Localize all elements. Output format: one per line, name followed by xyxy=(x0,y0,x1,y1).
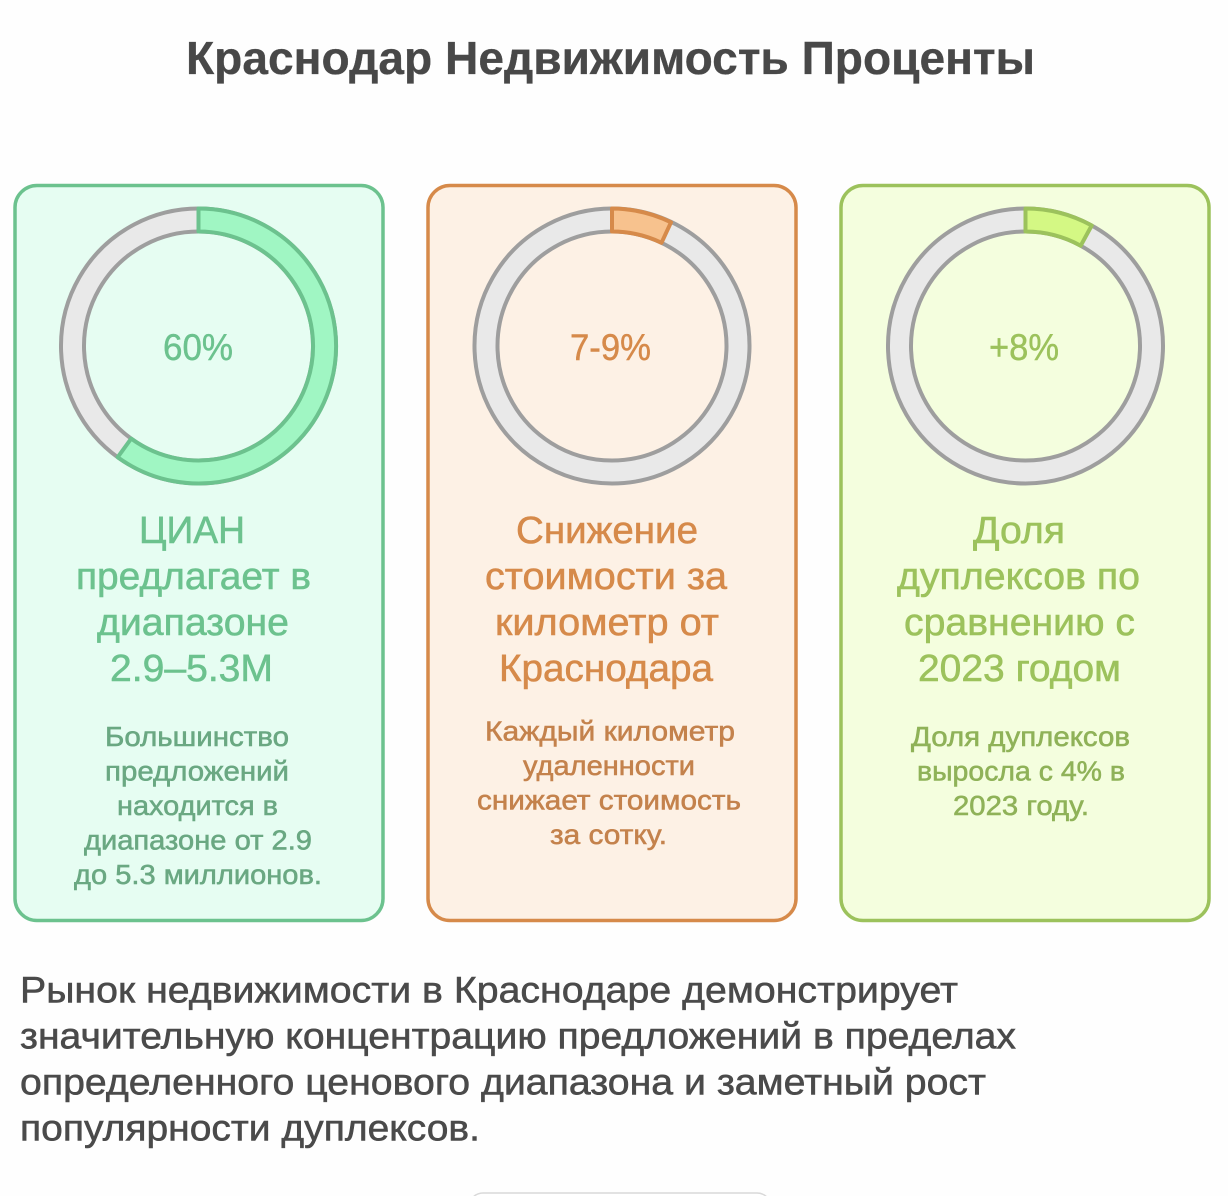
panel heading xyxy=(897,510,1140,690)
panel heading: дуплексов по xyxy=(897,556,1140,598)
panel description xyxy=(74,721,322,890)
panel: ЦИАН 60% xyxy=(15,186,383,920)
panel description: Большинство xyxy=(105,721,289,752)
panel description: за сотку. xyxy=(550,819,667,850)
donut chart: 60% xyxy=(61,208,336,483)
donut chart: +8%: +8% xyxy=(989,327,1059,368)
summary text: Рынок недвижимости в Краснодаре демонстрирует xyxy=(20,970,958,1010)
panel description: предложений xyxy=(105,756,289,786)
panel description: Доля дуплексов xyxy=(911,721,1130,752)
summary text xyxy=(20,970,1017,1148)
panel heading: Снижение xyxy=(516,510,698,552)
summary text: популярности дуплексов. xyxy=(20,1108,480,1148)
panel description: диапазоне от 2.9 xyxy=(84,824,312,856)
donut chart: 7-9%: 7-9% xyxy=(570,327,651,368)
panel heading: предлагает в xyxy=(76,556,311,598)
panel description xyxy=(911,721,1130,821)
panel heading: 2.9–5.3М xyxy=(110,648,273,690)
panel: доля дуплексов +8% xyxy=(841,186,1209,920)
panel description: снижает стоимость xyxy=(477,784,741,816)
panel: снижение стоимости 7-9% xyxy=(428,186,796,920)
panel heading xyxy=(76,510,311,690)
panel heading: 2023 годом xyxy=(918,648,1121,690)
panel description: до 5.3 миллионов. xyxy=(74,859,322,890)
panel description: 2023 году. xyxy=(953,790,1089,821)
title: Краснодар Недвижимость Проценты xyxy=(186,32,1035,84)
panel description xyxy=(477,716,741,850)
panel heading: ЦИАН xyxy=(139,510,245,552)
panel description: выросла с 4% в xyxy=(917,756,1125,786)
button edge at the bottom xyxy=(469,1193,771,1196)
donut chart: +8% xyxy=(888,208,1163,484)
panel description: находится в xyxy=(117,790,278,821)
panel heading xyxy=(485,510,728,690)
panel heading: диапазоне xyxy=(97,602,289,644)
donut chart: 7-9% xyxy=(474,208,749,484)
panel description: удаленности xyxy=(523,750,695,781)
summary text: значительную концентрацию предложений в пределах xyxy=(20,1016,1017,1056)
donut chart: 60%: 60% xyxy=(163,327,233,368)
summary text: определенного ценового диапазона и заметный рост xyxy=(20,1062,986,1102)
panel heading: километр от xyxy=(495,602,719,644)
panel heading: Краснодара xyxy=(499,648,714,690)
panel heading: Доля xyxy=(973,510,1065,552)
panel description: Каждый километр xyxy=(485,716,735,746)
panel heading: сравнению с xyxy=(904,602,1135,644)
panel heading: стоимости за xyxy=(485,556,728,598)
